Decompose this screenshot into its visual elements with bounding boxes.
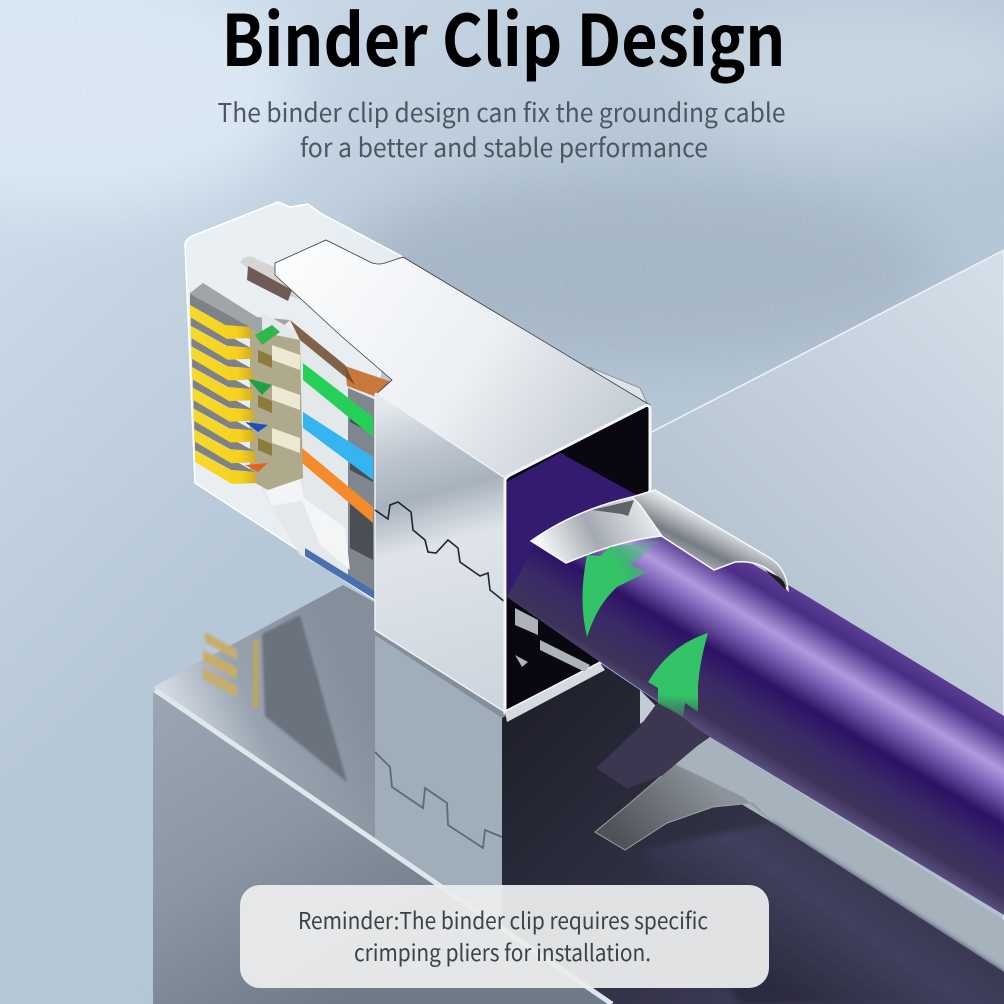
reflection of shell xyxy=(375,635,502,928)
interlocking seam xyxy=(375,502,505,602)
crimp contact blades xyxy=(245,325,303,490)
gold contacts xyxy=(190,294,257,484)
shield side face xyxy=(375,393,505,712)
reflective box xyxy=(153,585,1004,1004)
mounting tab xyxy=(640,690,660,724)
reminder callout: crimping pliers for installation. xyxy=(354,934,651,968)
purple cable xyxy=(507,453,1004,915)
clip tongue xyxy=(531,497,662,563)
reminder callout: Reminder:The binder clip requires specific xyxy=(298,902,708,936)
box edge highlight xyxy=(155,690,612,1004)
box front face xyxy=(153,692,612,1004)
reflection of cable xyxy=(640,823,1004,1004)
subtitle: for a better and stable performance xyxy=(300,128,708,165)
binder clip strap xyxy=(531,490,788,590)
subtitle: The binder clip design can fix the grounding cable xyxy=(218,93,786,130)
reflection of contacts xyxy=(203,615,347,782)
reminder callout xyxy=(240,885,769,988)
rotation arrow: lower xyxy=(648,633,708,717)
reflection of clip xyxy=(595,763,773,850)
RJ45 connector xyxy=(185,202,660,724)
box top face xyxy=(153,585,612,1004)
background plane surface xyxy=(640,250,1004,1004)
clip underside xyxy=(765,570,786,590)
rotation arrow: upper xyxy=(582,541,660,637)
clip notch xyxy=(592,500,634,516)
inner compartment xyxy=(262,312,392,600)
shield opening xyxy=(505,406,650,712)
metal inner carrier xyxy=(190,283,290,345)
shield top plate xyxy=(275,240,650,480)
dark reflection surface xyxy=(502,663,1004,1004)
lower shield tab xyxy=(505,663,605,722)
transparent plug housing xyxy=(185,202,648,600)
subtitle xyxy=(218,93,786,165)
reflected background band xyxy=(673,737,1004,972)
colored wires xyxy=(302,363,373,523)
lower clip blade xyxy=(597,700,707,788)
lower interior contacts xyxy=(515,608,590,672)
